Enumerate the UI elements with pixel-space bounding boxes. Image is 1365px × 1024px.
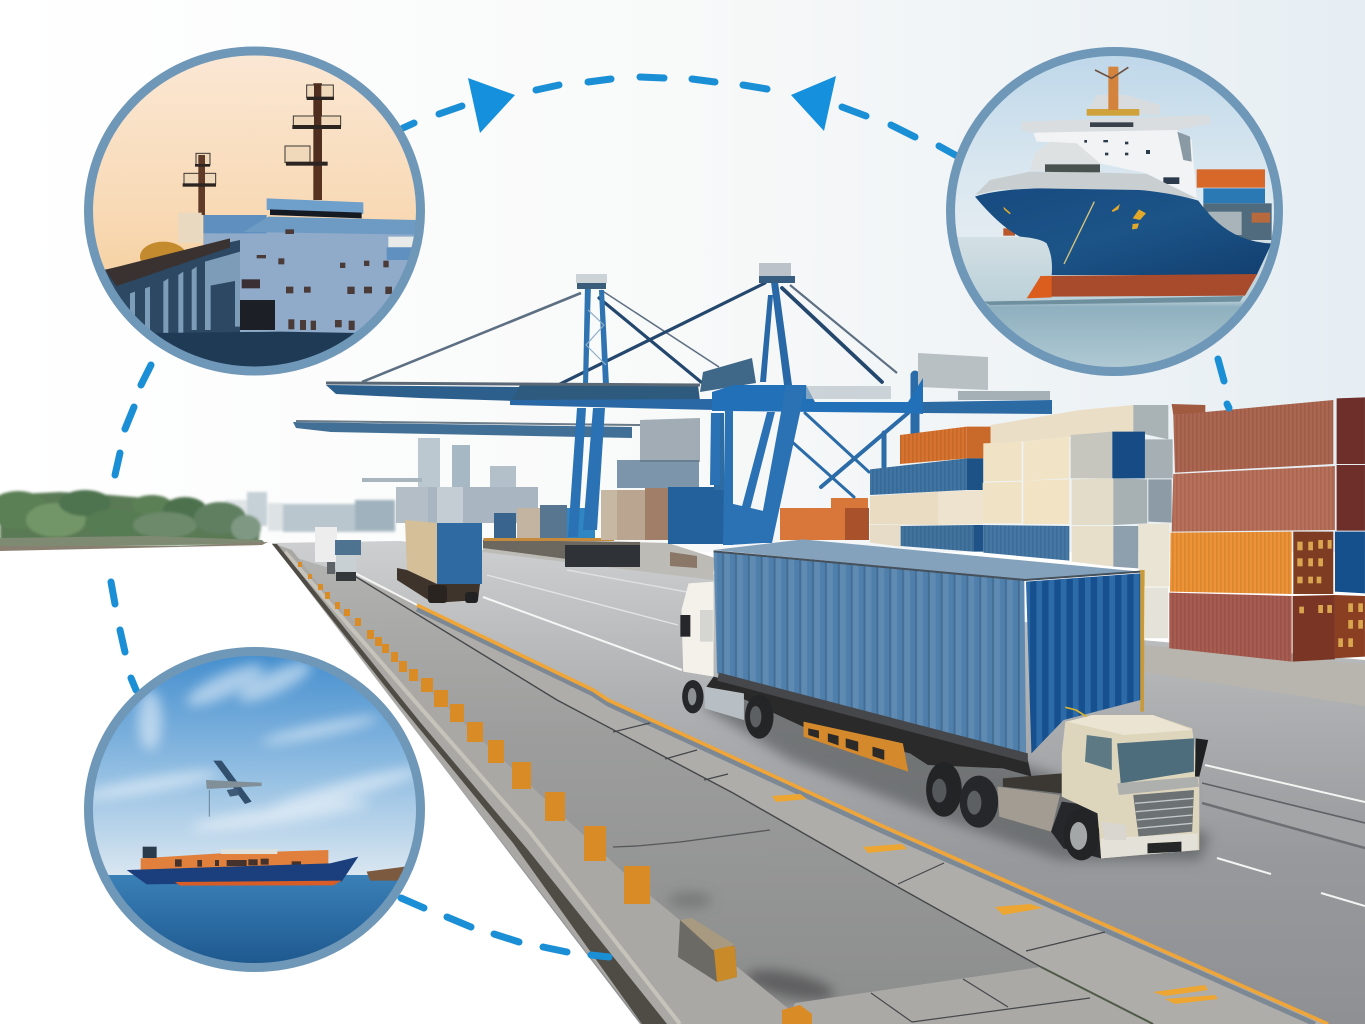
bridge windows: [1090, 122, 1133, 127]
forward house: [1030, 142, 1100, 173]
crane legs: [568, 385, 806, 545]
portholes: [1084, 140, 1179, 184]
bridge wing: [1022, 115, 1211, 133]
rear crane: [293, 413, 724, 490]
far city skyline: [225, 492, 395, 532]
wheel: [745, 695, 774, 739]
circle panel: container ship bow: [945, 45, 1285, 377]
truck shadow on road: [700, 690, 1210, 860]
cab rear window: [700, 610, 713, 642]
red containers: [1173, 400, 1333, 473]
red boot: [1040, 274, 1257, 297]
front wheel: [1064, 808, 1099, 860]
circle border: [950, 52, 1278, 372]
distant port buildings: [362, 438, 699, 523]
blue cargo: [1203, 188, 1265, 203]
middle truck with container: [397, 520, 482, 603]
grey side box: [705, 687, 744, 720]
ship cabin: [141, 850, 328, 870]
crane cables: [362, 285, 897, 382]
cargo yard machinery along road: [483, 538, 715, 580]
bottom red containers: [1169, 593, 1292, 662]
hub: [750, 706, 761, 727]
sea: [85, 875, 425, 975]
hull: [975, 188, 1272, 275]
lower road seam: [1202, 803, 1365, 848]
grille: [1133, 790, 1194, 837]
hub two: [967, 791, 981, 815]
sky background: [0, 0, 1365, 552]
dark asphalt stains: [668, 892, 837, 1006]
trolley machinery: [700, 358, 756, 392]
bright beam: [712, 378, 923, 414]
side corrugation: [714, 552, 1026, 753]
wheel two: [960, 776, 998, 828]
white lane line far: [483, 597, 682, 670]
headlight: [1101, 822, 1126, 840]
funnel: [178, 213, 202, 243]
flying crane: [206, 761, 262, 817]
circle panel: orange ship at sea: [80, 645, 425, 975]
deck cargo: [1203, 203, 1272, 240]
tower two: [759, 263, 795, 385]
upper road seam: [1202, 783, 1365, 823]
guard openings: [808, 728, 884, 760]
orange bow: [1027, 276, 1052, 298]
crane braces: [790, 375, 915, 497]
faint lane line top: [567, 570, 687, 592]
mast large: [313, 83, 322, 200]
top arc dashes: [403, 77, 957, 156]
hub one: [932, 779, 946, 803]
concrete panel seams: [613, 723, 1105, 1022]
yellow road marks: [772, 794, 1218, 1004]
tower one: [576, 274, 609, 385]
mast rail frames: [184, 85, 341, 184]
top cream row: [991, 405, 1133, 443]
hull: [127, 857, 358, 884]
front hub: [1070, 822, 1087, 850]
orange container lower: [1170, 532, 1292, 594]
mid handrail: [806, 386, 891, 399]
waterline: [175, 881, 342, 886]
ship superstructure: [203, 232, 414, 333]
concrete bottom panels: [785, 967, 1155, 1024]
plate: [1147, 842, 1181, 853]
route dashes: [111, 77, 1229, 957]
yellow road line: [417, 605, 1328, 1024]
roadside machine: [678, 918, 737, 982]
small mast platforms: [183, 164, 216, 187]
white dash: [1217, 858, 1271, 874]
windshield: [1117, 738, 1194, 783]
lower beam: [510, 399, 714, 410]
side window: [1085, 735, 1112, 770]
front crane: [326, 263, 1052, 545]
grille bars: [1135, 798, 1193, 828]
ship small windows: [257, 229, 392, 330]
container stacks: [870, 397, 1365, 662]
left dashes: [111, 365, 151, 690]
visor band: [1117, 777, 1199, 795]
sunset sky: [93, 56, 416, 270]
boom handrail: [326, 383, 700, 385]
blue side panel: [387, 247, 413, 260]
dark beam section: [512, 385, 700, 401]
background containers: [494, 487, 869, 544]
small boat: [367, 867, 405, 881]
fuel tank: [997, 787, 1060, 832]
shoreline island with trees: [0, 490, 268, 551]
bottom dashes: [401, 898, 609, 957]
mid cream and grey blocks: [983, 442, 1022, 482]
right handrail: [958, 391, 1050, 400]
machine house: [918, 353, 988, 390]
hub left: [688, 688, 696, 705]
cab roof: [1067, 715, 1192, 735]
circle panel: ship at sunset: [85, 45, 425, 375]
trailer chassis rail: [717, 673, 1028, 763]
lower deck dark: [155, 332, 355, 366]
sea: [958, 237, 1271, 367]
window strip: [1045, 164, 1100, 172]
dual rear wheels: [926, 762, 962, 817]
upper deck: [221, 849, 277, 854]
deck rails: [105, 238, 230, 286]
rear wheel left: [682, 680, 704, 713]
mast redraw: [314, 83, 322, 125]
yellow edge: [1140, 570, 1145, 712]
distant small boat: [1003, 228, 1015, 236]
mast tower: [1087, 95, 1160, 115]
road seam band right: [1202, 783, 1365, 848]
asphalt crack: [613, 830, 770, 847]
trees: [140, 242, 184, 261]
wing strut: [1177, 132, 1192, 162]
under-trailer shadow: [706, 677, 1031, 777]
right beam: [923, 400, 1052, 414]
upper blue band: [203, 215, 267, 233]
bridge windows: [270, 209, 362, 218]
white superstructure: [1033, 127, 1197, 198]
circle border: [88, 652, 420, 968]
top rail: [714, 551, 1140, 580]
cabin windows: [175, 859, 301, 867]
arrowhead right: [791, 76, 836, 131]
shadow beside yellow line: [417, 609, 1315, 1024]
white line start: [355, 573, 417, 605]
white foreground area: [0, 543, 660, 1024]
cab under frame: [1003, 773, 1062, 793]
blue container: [870, 458, 967, 495]
curb concrete strip: [272, 543, 812, 1024]
rust cargo: [1252, 213, 1270, 223]
bumper: [1101, 833, 1197, 858]
hull pillars: [130, 252, 240, 337]
radar mast: [143, 847, 157, 858]
far truck small: [315, 527, 361, 581]
cargo railing: [1208, 212, 1242, 235]
dark joint lower: [1041, 967, 1153, 1024]
orange side guard: [804, 722, 908, 772]
container corrugation: [870, 400, 1335, 662]
ground and road: [272, 541, 1365, 1024]
waterline shadow: [983, 296, 1243, 305]
yellow rail on cab: [1065, 707, 1087, 717]
pale curb line: [285, 552, 680, 1024]
clouds: [80, 655, 424, 835]
blue deck band: [243, 217, 417, 235]
cab body: [1062, 715, 1199, 858]
wheel arch: [1051, 802, 1101, 858]
cream containers: [870, 492, 938, 525]
accent panel: [388, 237, 414, 247]
orange mast: [1108, 67, 1118, 110]
door marks: [1297, 540, 1363, 647]
dark door: [240, 300, 275, 330]
panel joint: [353, 575, 1041, 967]
hull highlight stripe: [1064, 202, 1094, 264]
blue sky: [85, 645, 425, 877]
circle border: [88, 51, 420, 371]
main truck: [680, 539, 1208, 860]
white dash lower: [1321, 893, 1365, 906]
hull yellow marks: [1003, 204, 1146, 229]
faint lane line: [487, 575, 678, 625]
tractor rear cab: [681, 582, 714, 677]
yard pavement right: [1142, 645, 1365, 706]
small mast: [198, 155, 205, 215]
trailer roof: [714, 539, 1140, 580]
left hull section: [105, 240, 240, 333]
right mirror: [1195, 738, 1208, 777]
mast platforms: [286, 97, 341, 166]
pale sky: [955, 56, 1274, 237]
speckled asphalt panel: [290, 556, 1041, 1006]
shore line: [0, 542, 268, 551]
arrowhead left: [468, 78, 515, 133]
mast yellow deck: [1087, 109, 1139, 116]
bridge top: [267, 198, 363, 214]
side mirror: [680, 615, 690, 637]
orange container: [900, 427, 967, 464]
shore band: [0, 536, 265, 548]
red sign: [242, 279, 260, 288]
main boom left: [326, 385, 520, 401]
trailer side: [714, 552, 1026, 753]
cargo containers: [1197, 169, 1265, 188]
hatched dark edge: [272, 544, 667, 1024]
concrete strip beside yellow line: [353, 575, 1328, 1024]
right dashes: [1218, 359, 1229, 408]
mast arms: [1095, 67, 1128, 78]
lower blue containers: [901, 525, 973, 552]
rear corrugation: [1026, 573, 1140, 753]
forecastle deck: [975, 172, 1197, 198]
bollards along road edge: [298, 562, 812, 1024]
crane stays: [558, 283, 882, 385]
white lane line right: [1205, 765, 1365, 802]
trailer rear end: [1026, 573, 1140, 753]
